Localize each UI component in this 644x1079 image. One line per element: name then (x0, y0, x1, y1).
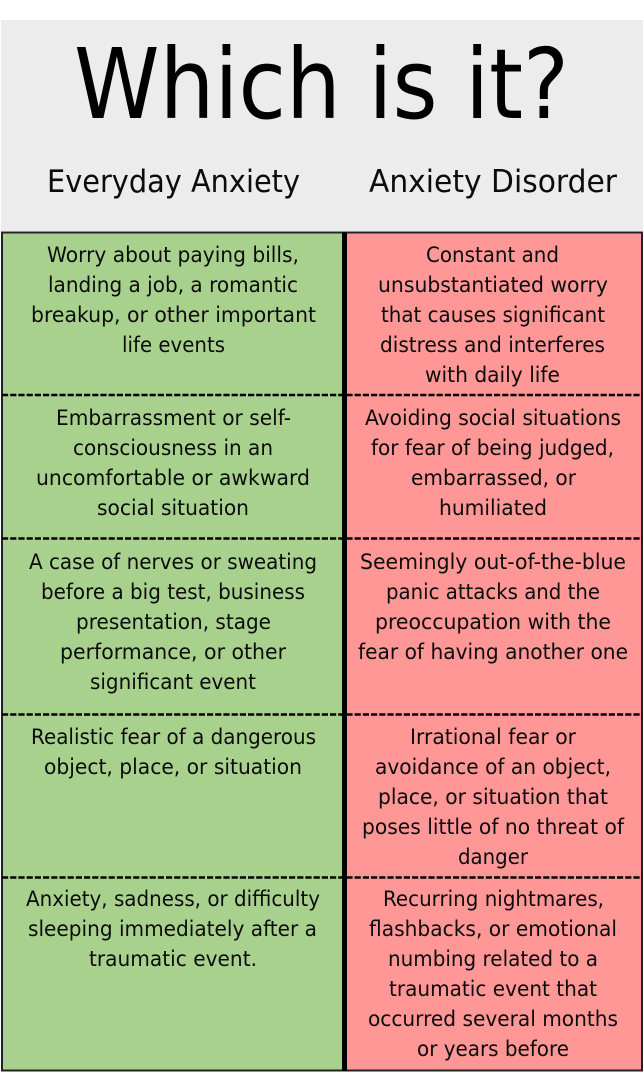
anxiety disorder: panic attacks (358, 550, 628, 665)
everyday anxiety: after a traumatic event (26, 887, 320, 972)
anxiety disorder: irrational fear: poses little of no threat of (362, 815, 624, 840)
anxiety disorder: recurring nightmares: numbing related to a (388, 947, 598, 972)
anxiety disorder: recurring nightmares: or years before (417, 1037, 569, 1062)
anxiety disorder: avoiding social situations: embarrassed, or (411, 466, 576, 491)
everyday anxiety: bills and life events (31, 243, 316, 358)
everyday anxiety: after a traumatic event: traumatic event. (89, 947, 257, 972)
anxiety disorder: recurring nightmares: flashbacks, or emotional (369, 917, 617, 942)
everyday anxiety: nerves: significant event (90, 670, 256, 695)
anxiety disorder: panic attacks: panic attacks and the (386, 580, 600, 605)
everyday anxiety: embarrassment: consciousness in an (73, 436, 273, 461)
everyday anxiety: realistic fear: object, place, or situation (44, 755, 302, 780)
anxiety disorder: irrational fear: avoidance of an object, (375, 755, 611, 780)
anxiety disorder: constant worry: unsubstantiated worry (378, 273, 608, 298)
anxiety disorder: recurring nightmares: traumatic event that (389, 977, 597, 1002)
everyday anxiety: nerves: presentation, stage (76, 610, 271, 635)
anxiety disorder: recurring nightmares (368, 887, 618, 1062)
header panel (1, 20, 643, 231)
everyday anxiety: bills and life events: landing a job, a romantic (48, 273, 298, 298)
everyday anxiety: realistic fear: Realistic fear of a dangerous (31, 725, 316, 750)
anxiety disorder: avoiding social situations: humiliated (439, 496, 547, 521)
anxiety disorder: panic attacks: fear of having another one (358, 640, 628, 665)
everyday anxiety: after a traumatic event: sleeping immediately after a (28, 917, 317, 942)
anxiety disorder: panic attacks: preoccupation with the (375, 610, 611, 635)
anxiety disorder: irrational fear: danger (458, 845, 528, 870)
everyday anxiety: nerves: performance, or other (60, 640, 286, 665)
anxiety disorder: constant worry: with daily life (425, 363, 560, 388)
anxiety disorder: constant worry: distress and interferes (380, 333, 605, 358)
anxiety disorder: irrational fear (362, 725, 624, 870)
anxiety disorder: avoiding social situations (365, 406, 621, 521)
column heading: anxiety disorder: Anxiety Disorder (369, 164, 617, 200)
anxiety disorder: irrational fear: place, or situation that (378, 785, 608, 810)
everyday anxiety: nerves: A case of nerves or sweating (29, 550, 317, 575)
everyday anxiety: realistic fear (31, 725, 316, 780)
everyday anxiety: embarrassment: social situation (97, 496, 249, 521)
anxiety disorder: constant worry: that causes significant (381, 303, 605, 328)
anxiety disorder: avoiding social situations: Avoiding social situations (365, 406, 621, 431)
anxiety disorder: recurring nightmares: occurred several months (368, 1007, 618, 1032)
comparison table background (1, 232, 642, 1071)
everyday anxiety: after a traumatic event: Anxiety, sadness, or difficulty (26, 887, 320, 912)
everyday anxiety: nerves: before a big test, business (41, 580, 305, 605)
anxiety disorder: constant worry (378, 243, 608, 388)
column heading: everyday anxiety: Everyday Anxiety (47, 164, 300, 200)
everyday anxiety: embarrassment: uncomfortable or awkward (36, 466, 310, 491)
anxiety disorder: constant worry: Constant and (426, 243, 559, 268)
anxiety disorder: recurring nightmares: Recurring nightmares, (383, 887, 604, 912)
anxiety disorder: avoiding social situations: for fear of being judged, (371, 436, 614, 461)
anxiety disorder: panic attacks: Seemingly out-of-the-blue (360, 550, 626, 575)
everyday anxiety: embarrassment (36, 406, 310, 521)
everyday anxiety: embarrassment: Embarrassment or self- (56, 406, 291, 431)
everyday anxiety: bills and life events: breakup, or other important (31, 303, 316, 328)
everyday anxiety: bills and life events: life events (122, 333, 225, 358)
title: Which is it? (74, 28, 569, 141)
everyday anxiety: nerves (29, 550, 317, 695)
anxiety disorder: irrational fear: Irrational fear or (410, 725, 576, 750)
everyday anxiety: bills and life events: Worry about paying bills, (47, 243, 299, 268)
